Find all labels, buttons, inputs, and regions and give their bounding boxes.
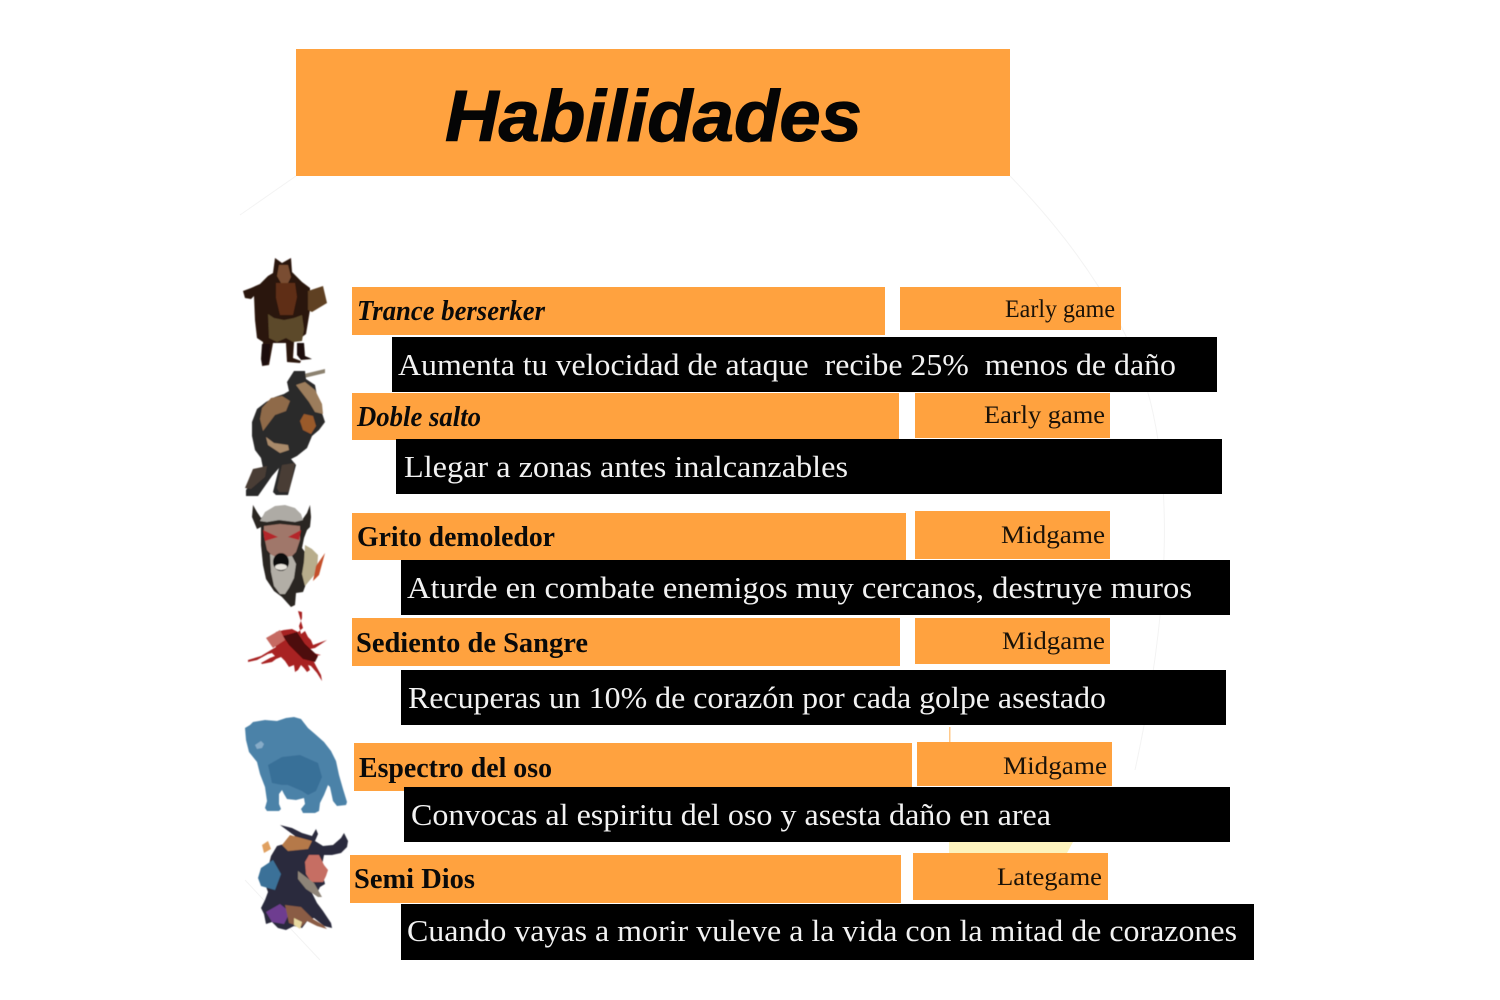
description bbox=[401, 560, 1230, 615]
icon: berserker in fur cloak bbox=[243, 258, 327, 366]
name bar bbox=[354, 743, 912, 791]
title banner bbox=[296, 49, 1010, 176]
stage tag bbox=[900, 287, 1121, 330]
icon: colourful horned warrior bbox=[258, 825, 348, 930]
stage tag: Midgame bbox=[1003, 753, 1107, 780]
row: Trance berserker bbox=[243, 258, 1217, 392]
stage tag bbox=[915, 511, 1110, 559]
description bbox=[392, 337, 1217, 392]
description: Convocas al espiritu del oso y asesta daño en area bbox=[411, 797, 1051, 832]
icon: armored dwarf with axe bbox=[245, 369, 325, 496]
name bar bbox=[352, 513, 906, 560]
description bbox=[396, 439, 1222, 494]
stage tag bbox=[917, 742, 1112, 786]
description: Aturde en combate enemigos muy cercanos, destruye muros bbox=[407, 570, 1192, 605]
description bbox=[401, 670, 1226, 725]
stage tag bbox=[915, 393, 1110, 438]
description bbox=[404, 787, 1230, 842]
skill name: Espectro del oso bbox=[359, 753, 552, 784]
stage tag: Lategame bbox=[997, 864, 1102, 891]
description bbox=[401, 904, 1254, 960]
name bar bbox=[350, 855, 901, 903]
row: Espectro del oso bbox=[245, 717, 1230, 842]
skill name: Semi Dios bbox=[354, 864, 475, 895]
row: Semi Dios bbox=[258, 825, 1254, 960]
name bar bbox=[352, 618, 900, 666]
row: Grito demoledor bbox=[252, 505, 1230, 615]
icon: blue spirit bear bbox=[245, 717, 347, 813]
stage tag: Early game bbox=[1005, 296, 1115, 323]
name bar bbox=[352, 287, 885, 335]
name bar bbox=[352, 393, 899, 440]
description: Cuando vayas a morir vuleve a la vida con la mitad de corazones bbox=[407, 913, 1237, 948]
description: Aumenta tu velocidad de ataque recibe 25% menos de daño bbox=[398, 347, 1176, 382]
skill name: Grito demoledor bbox=[357, 522, 555, 553]
yellow accent behind rows bbox=[949, 727, 1073, 853]
icon: blood splatter bbox=[248, 611, 327, 681]
icon: shouting viking face bbox=[252, 505, 325, 607]
stage tag: Midgame bbox=[1002, 628, 1105, 655]
background circle outline bbox=[240, 176, 1164, 960]
stage tag: Midgame bbox=[1001, 522, 1105, 549]
title banner: Habilidades bbox=[445, 77, 862, 157]
row: Sediento de Sangre bbox=[248, 611, 1226, 725]
description: Recuperas un 10% de corazón por cada golpe asestado bbox=[408, 680, 1106, 715]
stage tag: Early game bbox=[984, 402, 1105, 429]
skill name: Trance berserker bbox=[357, 296, 546, 327]
stage tag bbox=[913, 853, 1108, 900]
stage tag bbox=[915, 618, 1110, 664]
description: Llegar a zonas antes inalcanzables bbox=[404, 449, 848, 484]
skill name: Sediento de Sangre bbox=[356, 628, 588, 659]
row: Doble salto bbox=[245, 369, 1222, 496]
skill name: Doble salto bbox=[356, 402, 481, 433]
